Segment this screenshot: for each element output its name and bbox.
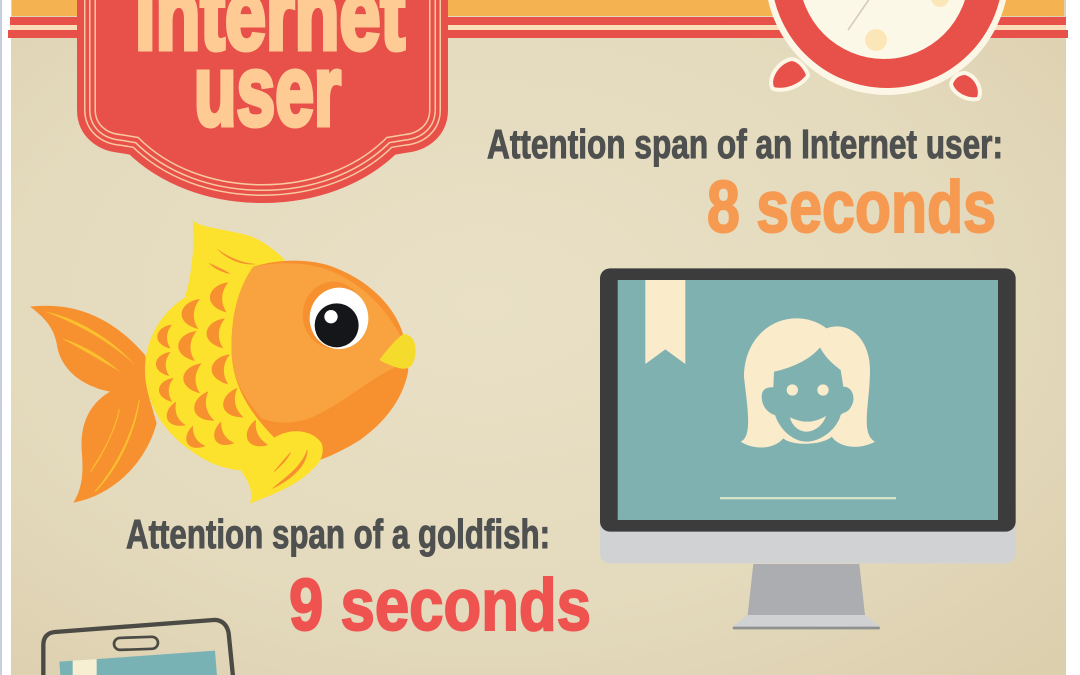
fish scales [156,282,270,454]
face icon [741,318,875,448]
icon: desktop monitor [600,268,1016,629]
icon: tablet [43,620,233,675]
text: 8 seconds: 8 seconds [707,167,996,248]
icon: goldfish [30,220,416,503]
badge: Internet user [99,0,426,181]
icon: alarm clock [765,0,1009,97]
top header band [8,0,1068,38]
text: 9 seconds: 9 seconds [289,565,591,646]
badge: Internet user: user [194,35,341,147]
text: attention span of a goldfish: Attention span of a goldfish: [126,511,550,557]
